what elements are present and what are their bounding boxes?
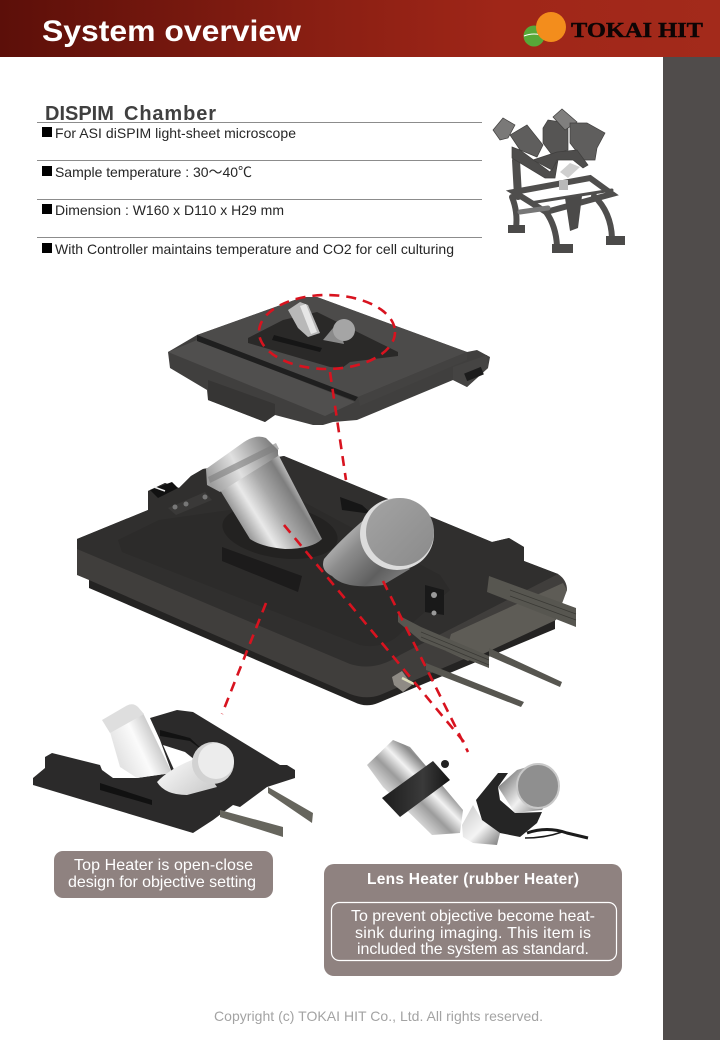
copyright: Copyright (c) TOKAI HIT Co., Ltd. All rights reserved. — [214, 1008, 543, 1024]
stage chamber — [248, 312, 398, 368]
lens heater cable — [527, 830, 588, 838]
specification list: Dimension : W160 x D110 x H29 mm — [55, 202, 284, 218]
callout: lens heater — [324, 864, 622, 976]
logo: Tokai Hit — [524, 12, 703, 46]
chamber body — [89, 570, 555, 705]
frame legs — [512, 160, 612, 246]
specification list: Sample temperature : 30～40℃ — [55, 164, 252, 180]
diSPIM microscope frame illustration — [493, 109, 625, 253]
specification list: For ASI diSPIM light-sheet microscope — [55, 125, 296, 141]
callout: top heater — [54, 851, 273, 898]
callout: lens heater: included the system as standard. — [357, 941, 589, 958]
objective lens 2 — [323, 518, 410, 586]
frame upper optics — [493, 109, 605, 178]
title: System overview — [42, 15, 302, 48]
objective lens 1 — [220, 454, 322, 549]
specification list — [37, 122, 482, 257]
callout: top heater: design for objective setting — [68, 874, 256, 891]
section heading: DISPIM — [45, 103, 114, 125]
main chamber illustration — [77, 437, 576, 707]
heater lens 1 — [110, 713, 172, 778]
lens heater illustration — [367, 740, 588, 845]
lens heater objective 2 — [462, 805, 500, 845]
callout: top heater: Top Heater is open-close — [74, 857, 253, 874]
callout: lens heater: Lens Heater (rubber Heater) — [367, 871, 579, 888]
callout: lens heater: sink during imaging. This item is — [355, 925, 591, 942]
red dashed callout lines — [222, 295, 468, 752]
heater ribbon cables — [220, 787, 313, 837]
chamber right side metal — [446, 583, 567, 661]
specification list: With Controller maintains temperature and CO2 for cell culturing — [55, 241, 454, 257]
right sidebar — [663, 57, 720, 1040]
top heater illustration — [33, 704, 313, 837]
stage body — [168, 297, 490, 425]
heater lens 2 — [157, 758, 217, 795]
frame feet and centre blade — [508, 196, 625, 253]
ribbon cables — [398, 576, 576, 707]
logo: Tokai Hit: TOKAI HIT — [571, 18, 703, 42]
header bar — [0, 0, 720, 57]
section heading: Chamber — [124, 103, 216, 125]
microscope stage illustration — [168, 297, 490, 425]
callout: lens heater: To prevent objective become heat- — [351, 908, 595, 925]
lens heater objective 1 — [367, 740, 463, 835]
